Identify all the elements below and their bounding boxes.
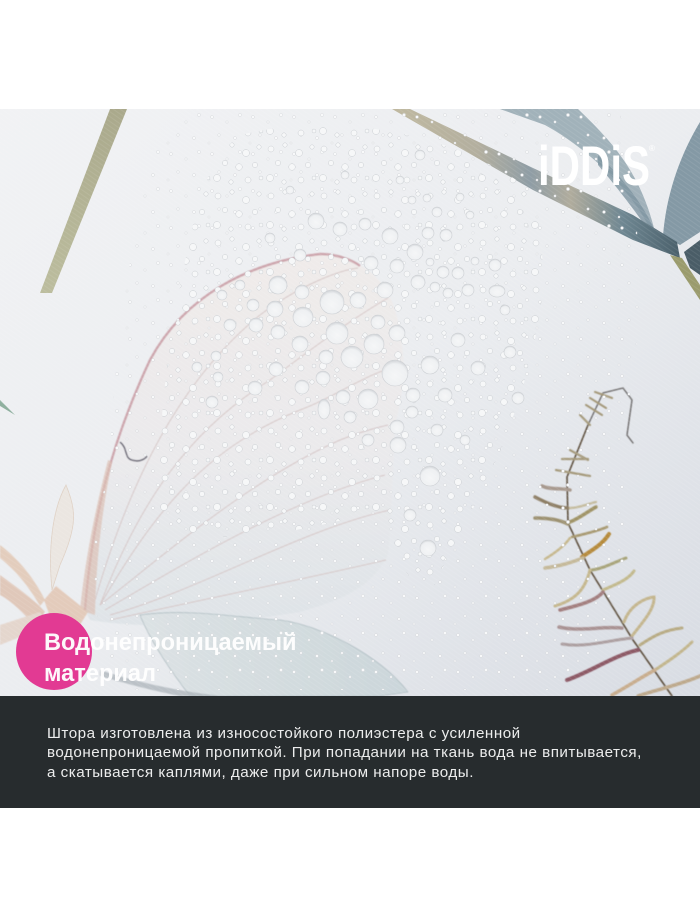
- ribbon stem top right: [392, 109, 680, 258]
- small water droplets: [94, 113, 638, 690]
- description text: водонепроницаемой пропиткой. При попадании на ткань вода не впитывается,: [47, 744, 642, 761]
- pink circle behind heading: [16, 613, 92, 690]
- heading: Водонепроницаемый: [44, 630, 297, 656]
- flower centre with peach stems: [0, 460, 220, 696]
- logo: iDDiS: ®: [649, 144, 655, 153]
- heading: материал: [44, 661, 156, 687]
- photo: shower curtain fabric with water drops: [0, 109, 700, 696]
- logo: iDDiS: iDDiS: [538, 134, 650, 197]
- wing: large pale petal: [85, 254, 405, 625]
- thin petal beside flower centre: [51, 485, 74, 590]
- dark description band: [0, 696, 700, 808]
- fabric background: [0, 109, 700, 696]
- fern: [535, 388, 700, 696]
- fabric weave texture: [0, 109, 700, 696]
- description text: Штора изготовлена из износостойкого полиэстера с усиленной: [47, 724, 521, 742]
- gold strand right edge: [670, 255, 700, 300]
- description text: а скатывается каплями, даже при сильном напоре воды.: [47, 764, 474, 781]
- large water droplets: [192, 150, 524, 556]
- blue leaves top right: [500, 109, 700, 275]
- heading: [44, 630, 297, 687]
- description text: [47, 724, 642, 781]
- green leaf tip left edge: [0, 400, 15, 415]
- lower blue petal: [140, 613, 408, 696]
- olive stem top left: [40, 109, 127, 293]
